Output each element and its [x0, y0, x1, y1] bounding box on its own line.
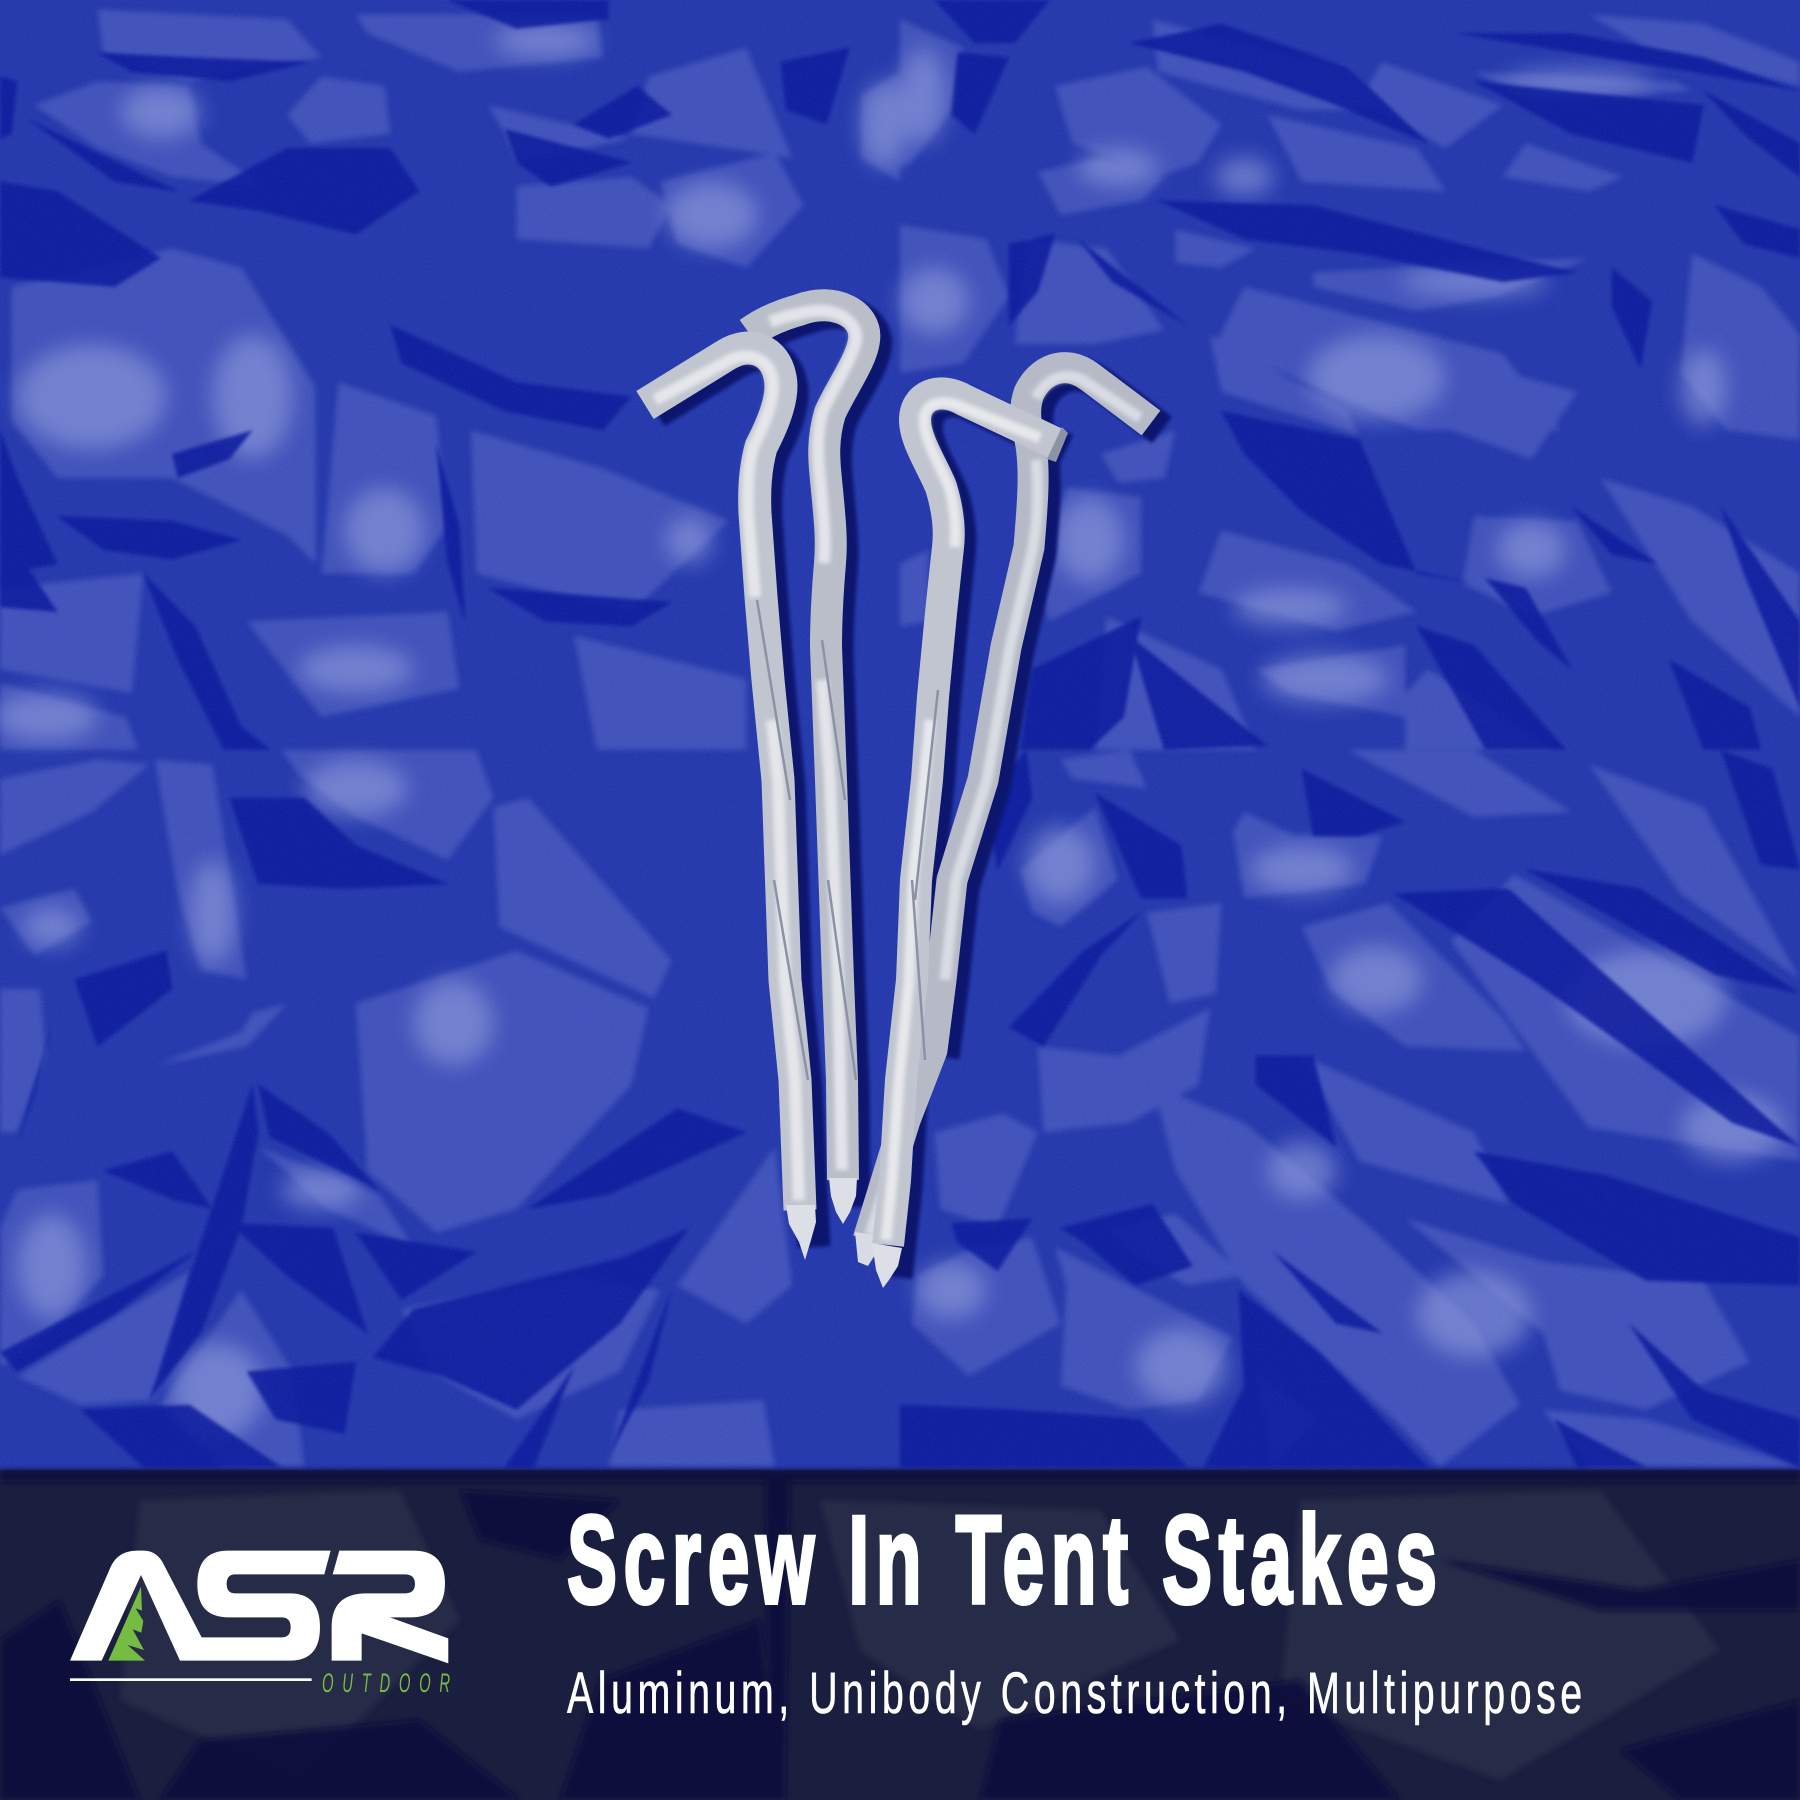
logo tagline: OUTDOOR: [322, 1667, 450, 1698]
stake 1: [645, 348, 816, 1260]
subtitle: Aluminum, Unibody Construction, Multipurpose: [567, 1660, 1582, 1726]
logo: ASR Outdoor: [70, 1551, 448, 1681]
stake 4: [855, 368, 1151, 1266]
title: Screw In Tent Stakes: [567, 1490, 1437, 1630]
logo underline: [70, 1678, 312, 1681]
stakes: four aluminum tent stakes: [645, 305, 1162, 1288]
stake 2: [749, 305, 864, 1224]
banner: dark translucent band with fabric showing through: [0, 1470, 1800, 1800]
logo letters A and S: [70, 1551, 331, 1661]
logo tree icon: [108, 1587, 145, 1661]
stake shadows: [656, 312, 1162, 1277]
logo letter R: [332, 1551, 448, 1663]
stake 3: [872, 393, 1068, 1288]
